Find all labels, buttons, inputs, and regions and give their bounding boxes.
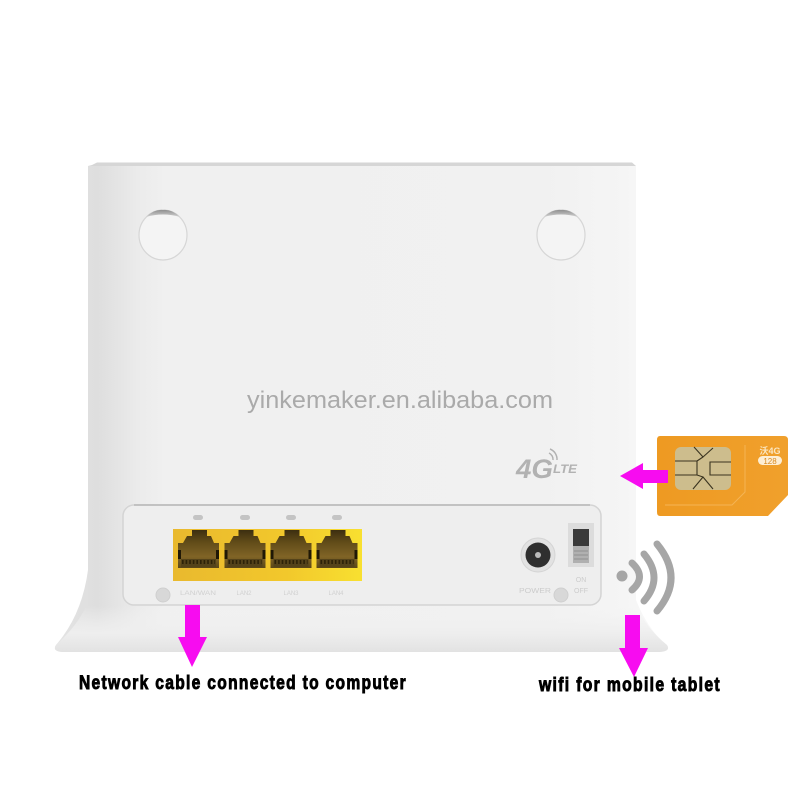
router body <box>55 162 668 652</box>
4G LTE logo: 4G <box>515 454 553 484</box>
port labels: LAN2 <box>236 591 252 597</box>
ethernet ports <box>173 529 362 581</box>
arrow: wifi <box>619 615 648 677</box>
left mounting hole <box>139 210 187 260</box>
4G LTE logo <box>515 449 578 484</box>
SIM card <box>657 436 788 516</box>
port labels: LAN/WAN <box>180 591 216 597</box>
reset button <box>156 588 170 602</box>
right mounting hole <box>537 210 585 260</box>
power switch <box>568 523 594 595</box>
power switch: ON <box>576 577 586 584</box>
port labels <box>180 591 344 597</box>
power switch: OFF <box>574 588 588 595</box>
SIM chip <box>675 447 731 490</box>
power socket <box>521 538 555 572</box>
port labels: LAN4 <box>328 591 344 597</box>
arrow: network cable <box>178 605 207 667</box>
SIM brand text <box>758 445 782 466</box>
SIM brand text: 沃4G <box>759 445 781 456</box>
port panel <box>123 505 601 605</box>
caption: network cable: Network cable connected to computer <box>79 673 407 694</box>
port labels: LAN3 <box>283 591 299 597</box>
watermark: yinkemaker.en.alibaba.com <box>247 387 553 414</box>
status LEDs <box>193 515 342 520</box>
power label and button <box>519 588 568 602</box>
icon: wifi signal <box>616 544 671 611</box>
SIM brand text: 128 <box>763 457 777 466</box>
caption: wifi: wifi for mobile tablet <box>538 675 721 696</box>
4G LTE logo: LTE <box>553 462 578 476</box>
arrow: SIM slot <box>620 463 668 489</box>
power label and button: POWER <box>519 588 551 595</box>
